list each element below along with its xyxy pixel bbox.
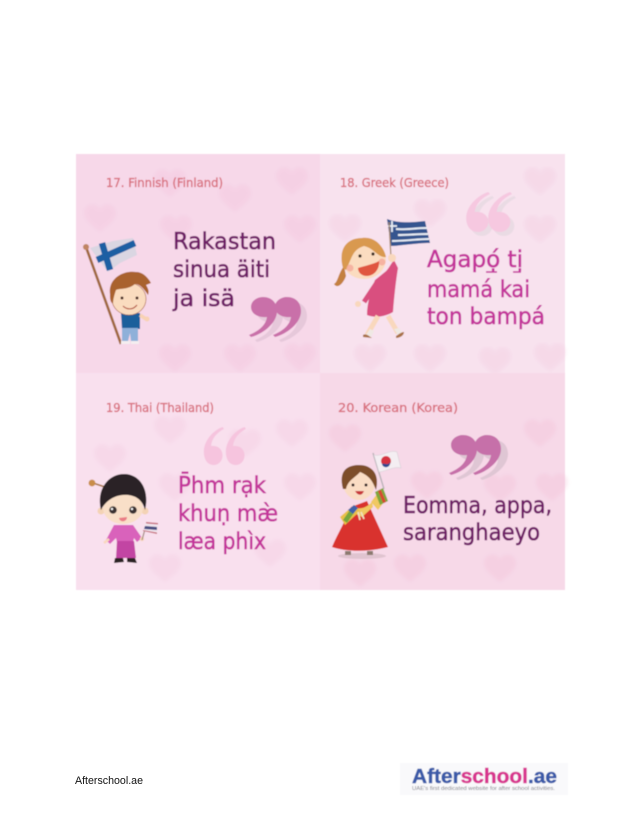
phrase: Rakastan sinua äiti ja isä [172, 229, 276, 312]
panel: Korean [320, 373, 568, 590]
logo: Afterschool.ae: UAE's first dedicated website for after school activities. [412, 786, 555, 792]
heading: 19 Thai: 19. Thai (Thailand) [106, 400, 214, 415]
phrase: Agapó ti mamá kai ton bampá: ton bampá [427, 304, 545, 330]
panel: Greek [320, 154, 566, 375]
phrase: Rakastan sinua äiti ja isä: ja isä [172, 286, 235, 312]
panel: Thai [76, 373, 320, 590]
phrase: Agapó ti mamá kai ton bampá [427, 247, 545, 330]
phrase: Phm rak khun mae laea phix: khuṇ mæ̀ [178, 501, 278, 527]
logo: Afterschool.ae: Afterschool.ae [412, 766, 557, 788]
phrase: Agapó ti mamá kai ton bampá: Agapọ́ tị [427, 247, 523, 273]
phrase: Eomma, appa, saranghaeyo [403, 493, 552, 546]
phrase: Phm rak khun mae laea phix: læa phìx [178, 529, 266, 555]
phrase: Phm rak khun mae laea phix [178, 471, 278, 555]
heading: 17 Finnish: 17. Finnish (Finland) [106, 175, 223, 190]
illustration: girl with Greek flag [334, 219, 430, 338]
icon: closing quote [449, 435, 508, 480]
infographic image [76, 154, 568, 590]
illustration: girl in hanbok with Korean flag [332, 451, 401, 559]
phrase: Eomma, appa, saranghaeyo: Eomma, appa, [403, 493, 552, 519]
phrase: Phm rak khun mae laea phix: P̄hm rạk [178, 471, 267, 499]
heading: 18 Greek: 18. Greek (Greece) [340, 175, 449, 190]
phrase: Agapó ti mamá kai ton bampá: mamá kai [427, 277, 530, 303]
illustration: boy with Finnish flag [83, 238, 151, 344]
footer text: Afterschool.ae [75, 775, 143, 787]
icon: opening quote [204, 427, 246, 465]
phrase: Rakastan sinua äiti ja isä: sinua äiti [173, 257, 270, 283]
illustration: Thai child [89, 474, 158, 563]
icon: closing quote [249, 297, 307, 342]
phrase: Eomma, appa, saranghaeyo: saranghaeyo [403, 520, 540, 546]
icon: opening quote [466, 192, 516, 236]
logo: Afterschool.ae [400, 763, 568, 795]
panel: Finnish [76, 154, 320, 373]
phrase: Rakastan sinua äiti ja isä: Rakastan [173, 229, 276, 255]
heading: 20 Korean: 20. Korean (Korea) [338, 400, 458, 415]
